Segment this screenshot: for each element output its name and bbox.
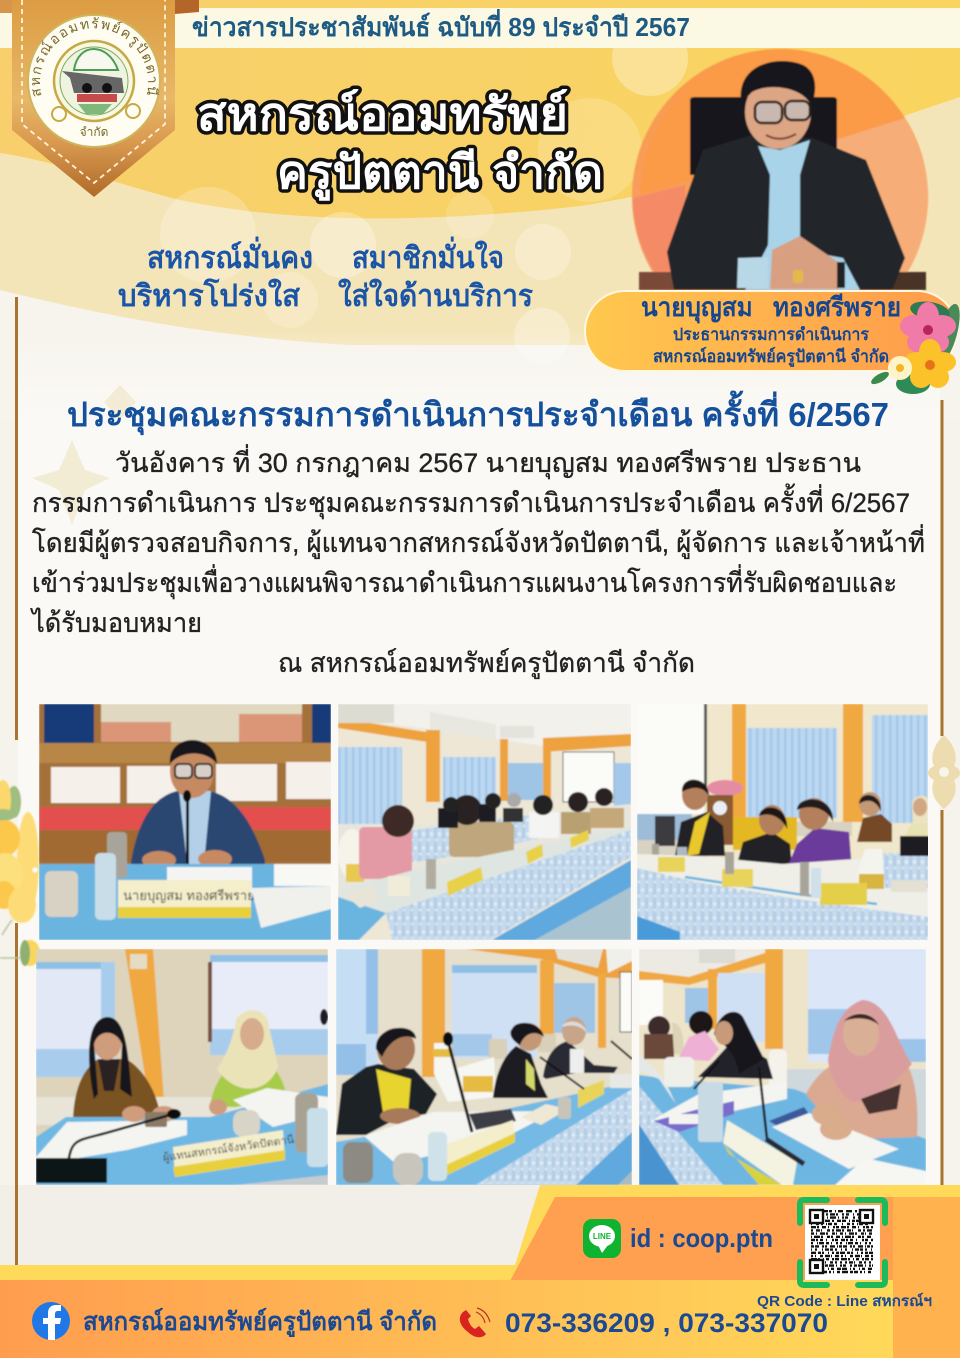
event body text [30, 444, 925, 679]
event body text: ณ สหกรณ์ออมทรัพย์ครูปัตตานี จำกัด [278, 647, 695, 679]
ornaments [32, 385, 136, 525]
photo 1: chairman at table: นายบุญสม ทองศรีพราย [123, 888, 255, 904]
ribbon badge with seal [12, 0, 199, 197]
seal: จำกัด [80, 125, 108, 139]
chairman portrait [632, 49, 928, 345]
event body text: ได้รับมอบหมาย [30, 608, 202, 638]
motto: สมาชิกมั่นใจ [352, 236, 504, 275]
tropical flowers [869, 299, 960, 394]
footer panel [0, 1185, 960, 1358]
yellow hibiscus [904, 339, 956, 388]
left flowers [0, 780, 40, 966]
motto: บริหารโปร่งใส [118, 277, 301, 313]
motto [118, 236, 533, 313]
photo 2: meeting room [338, 704, 631, 940]
photo 4: two women [36, 949, 328, 1185]
photo 6: woman in pink hijab [639, 949, 926, 1185]
event body text: กรรมการดำเนินการ ประชุมคณะกรรมการดำเนินการประจำเดือน ครั้งที่ 6/2567 [32, 483, 910, 520]
phone numbers: 073-336209 , 073-337070 [505, 1308, 828, 1338]
photo 3: committee table [637, 704, 928, 940]
facebook icon [32, 1302, 70, 1340]
seal [27, 14, 161, 148]
phone icon [460, 1308, 490, 1337]
header text: ข่าวสารประชาสัมพันธ์ ฉบับที่ 89 ประจำปี 2567 [192, 8, 690, 42]
chairman name: นายบุญสม ทองศรีพราย [641, 292, 901, 324]
seal: สหกรณ์ออมทรัพย์ครูปัตตานี [32, 17, 159, 96]
event body text: วันอังคาร ที่ 30 กรกฎาคม 2567 นายบุญสม ทองศรีพราย ประธาน [115, 444, 861, 480]
event heading: ประชุมคณะกรรมการดำเนินการประจำเดือน ครั้งที่ 6/2567 [67, 390, 889, 436]
header strip [0, 0, 960, 48]
right ornament [928, 735, 960, 809]
event body text: โดยมีผู้ตรวจสอบกิจการ, ผู้แทนจากสหกรณ์จังหวัดปัตตานี, ผู้จัดการ และเจ้าหน้าที่ [32, 524, 925, 559]
facebook name: สหกรณ์ออมทรัพย์ครูปัตตานี จำกัด [83, 1307, 437, 1338]
photo 1: chairman at table [39, 704, 331, 940]
qr code [800, 1200, 885, 1285]
main title: สหกรณ์ออมทรัพย์ [197, 88, 568, 140]
motto: ใส่ใจด้านบริการ [338, 278, 533, 313]
line icon [583, 1219, 621, 1258]
side rules [15, 297, 944, 1265]
photo 5: officials at table [336, 949, 632, 1185]
decorative bubbles [160, 20, 688, 364]
main title [197, 88, 603, 201]
name plate: สหกรณ์ออมทรัพย์ครูปัตตานี จำกัด [653, 346, 889, 368]
name plate [585, 291, 957, 371]
pink hibiscus [900, 302, 956, 353]
line id: id : coop.ptn [630, 1223, 773, 1253]
line icon: LINE [593, 1232, 612, 1241]
main title: ครูปัตตานี จำกัด [277, 146, 603, 201]
chairman position: ประธานกรรมการดำเนินการ [673, 325, 870, 344]
event body text: เข้าร่วมประชุมเพื่อวางแผนพิจารณาดำเนินการแผนงานโครงการที่รับผิดชอบและ [32, 564, 897, 600]
motto: สหกรณ์มั่นคง [147, 236, 313, 275]
photo 4: two women: ผู้แทนสหกรณ์จังหวัดปัตตานี [162, 1133, 295, 1164]
qr caption: QR Code : Line สหกรณ์ฯ [757, 1292, 932, 1310]
